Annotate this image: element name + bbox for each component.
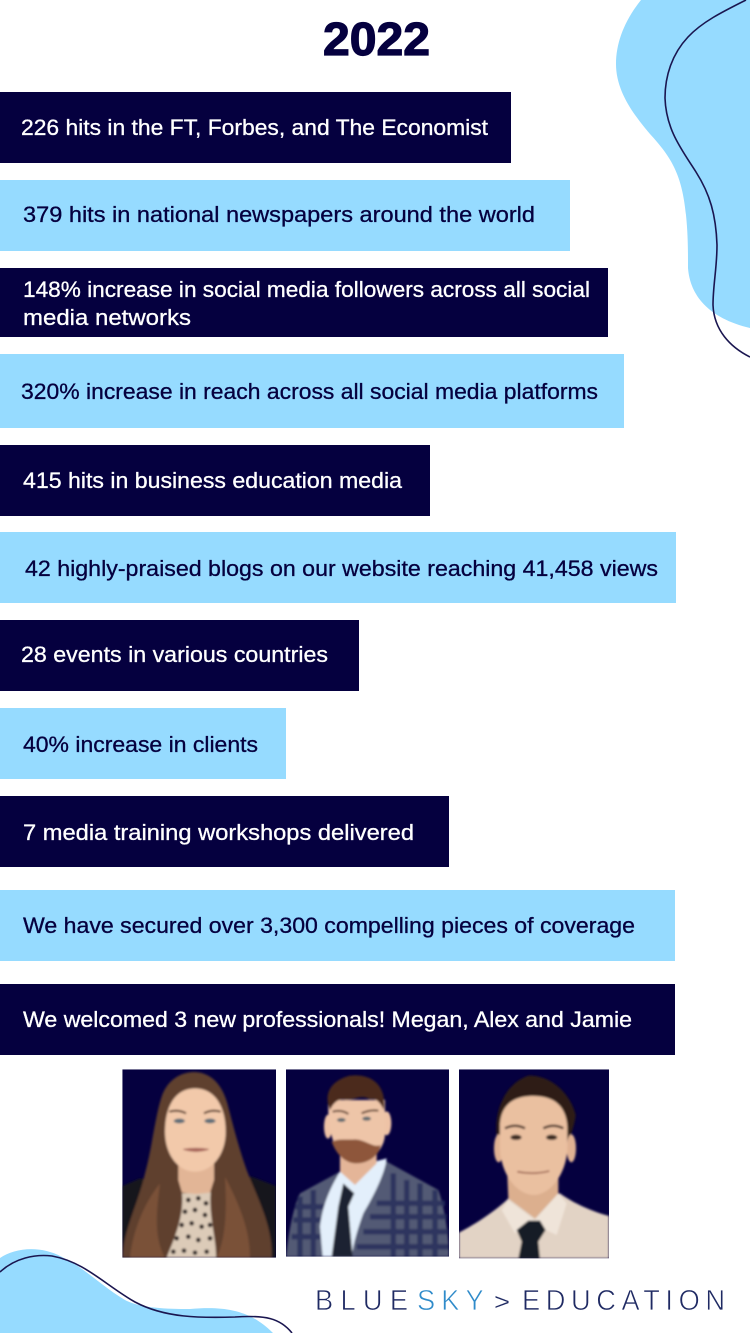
portrait: Jamie (459, 1069, 609, 1258)
bar: media training workshops: 7 media training workshops delivered (23, 820, 414, 845)
bar: social media followers: 148% increase in social media followers across all social (23, 277, 590, 302)
bar: FT, Forbes, Economist hits (0, 92, 511, 163)
bar: business education media hits: 415 hits in business education media (23, 468, 403, 493)
portraits row (122, 1069, 609, 1258)
bar: social media followers: media networks (23, 305, 191, 330)
bar: social media followers (0, 268, 608, 337)
bar: events (0, 620, 359, 691)
bar: social media reach: 320% increase in reach across all social media platforms (21, 379, 598, 404)
bar: blogs and views (0, 532, 676, 603)
bar: new professionals: We welcomed 3 new professionals! Megan, Alex and Jamie (23, 1007, 632, 1032)
decorative blob: top right (616, 0, 750, 357)
logo: Bluesky Education (315, 1284, 725, 1316)
bar: social media reach (0, 354, 624, 428)
bar: pieces of coverage: We have secured over 3,300 compelling pieces of coverage (23, 913, 635, 938)
logo: Bluesky Education: BLUE (315, 1284, 408, 1316)
bar: national newspaper hits: 379 hits in national newspapers around the world (23, 202, 535, 227)
decorative blob: bottom left (0, 1249, 292, 1333)
bar: clients (0, 708, 286, 779)
bar: business education media hits (0, 445, 430, 516)
bar: new professionals (0, 984, 675, 1055)
logo: Bluesky Education: SKY (417, 1284, 484, 1316)
portrait: Megan (122, 1069, 276, 1258)
logo: Bluesky Education: EDUCATION (522, 1284, 725, 1316)
bar: FT, Forbes, Economist hits: 226 hits in the FT, Forbes, and The Economist (21, 115, 488, 140)
bar: events: 28 events in various countries (21, 642, 328, 667)
bar: blogs and views: 42 highly-praised blogs on our website reaching 41,458 views (25, 556, 658, 581)
bar: media training workshops (0, 796, 449, 867)
portrait: Alex (286, 1069, 449, 1257)
bar: pieces of coverage (0, 890, 675, 961)
logo: Bluesky Education: > (494, 1289, 510, 1316)
bar: clients: 40% increase in clients (23, 732, 258, 757)
bar: national newspaper hits (0, 180, 570, 251)
title: 2022 (323, 13, 430, 65)
